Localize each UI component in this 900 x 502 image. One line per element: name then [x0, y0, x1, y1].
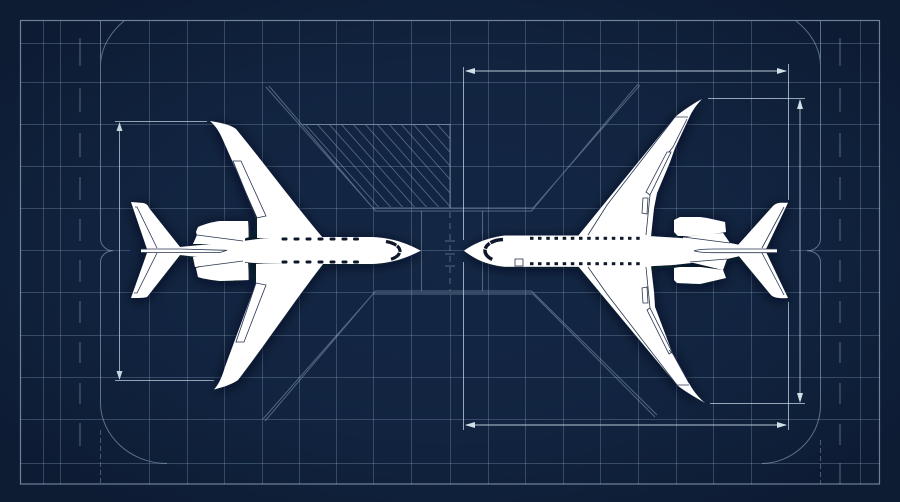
left aircraft windshield — [386, 242, 400, 260]
lower boundary extensions — [100, 430, 820, 484]
right aircraft silhouette — [464, 99, 788, 403]
aircraft: right, top view — [464, 99, 788, 403]
aircraft: left, top view — [131, 121, 421, 390]
length dimension: right aircraft — [464, 64, 788, 430]
right aircraft details — [515, 117, 784, 385]
runway centre dashes — [80, 38, 840, 484]
right aircraft windows — [530, 237, 640, 265]
left aircraft silhouette — [131, 121, 421, 390]
taxiway lines — [263, 84, 657, 421]
wingspan dimension: left aircraft — [115, 122, 214, 380]
hatched apron — [303, 124, 450, 208]
left aircraft windows — [282, 238, 359, 264]
inner rounded boundary — [100, 21, 820, 464]
wingspan dimension: right aircraft — [708, 98, 805, 404]
left aircraft details — [134, 161, 266, 342]
right aircraft windshield — [485, 240, 503, 262]
